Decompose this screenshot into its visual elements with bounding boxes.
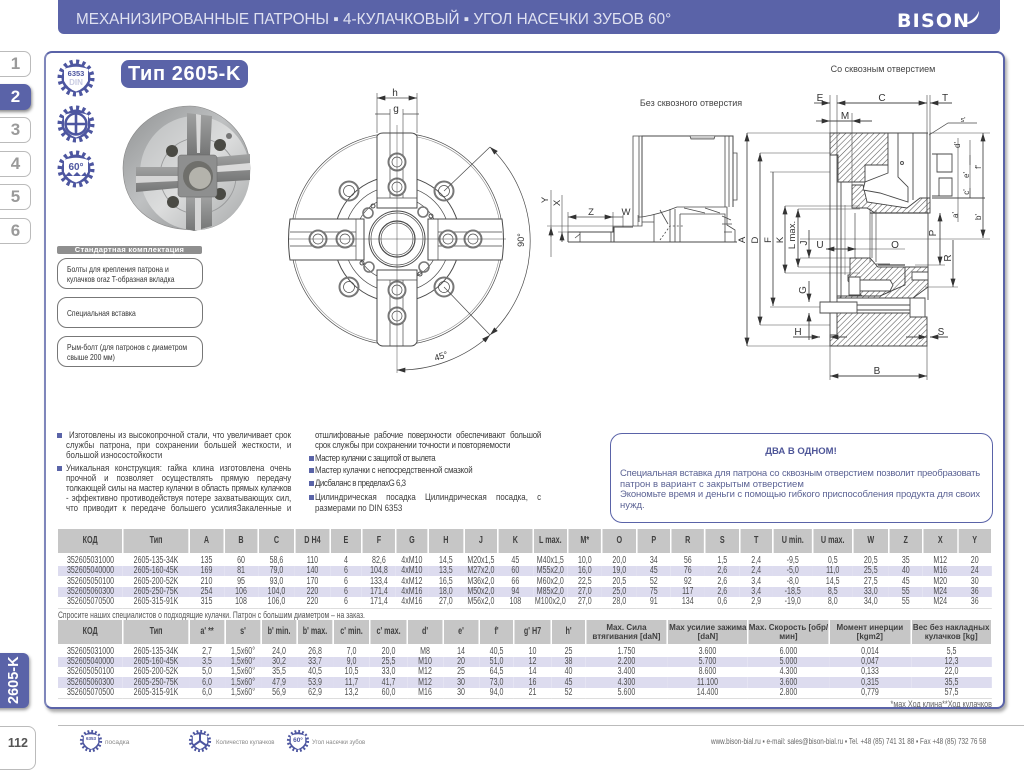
callout body: Специальная вставка для патрона со сквозным отверстием позволит преобразовать	[620, 468, 980, 479]
kit item: eye bolt: Рым-болт (для патронов с диаметром	[67, 342, 187, 352]
page number tab: 112	[8, 736, 28, 750]
tab 1	[0, 51, 31, 77]
specifications table: a' **	[200, 626, 214, 637]
specifications table: c' min.	[340, 626, 363, 637]
dimensions table: M*	[580, 535, 589, 546]
icon: 4 jaws badge	[60, 108, 92, 140]
section view labels: G	[798, 286, 809, 294]
kit item: eye bolt: свыше 200 мм)	[67, 352, 115, 362]
footer divider	[58, 724, 1024, 726]
icon: DIN 6353 badge: 6353	[68, 69, 84, 78]
section view labels: d'	[953, 142, 962, 148]
dimensions table: X	[938, 535, 943, 546]
dimensions table: O	[616, 535, 622, 546]
specifications table: [kgm2]	[857, 632, 883, 641]
callout body: Экономьте время и деньги с помощью гибкого приспособления продукта для своих	[620, 489, 980, 500]
specifications table: Тип	[150, 626, 162, 637]
front view labels	[392, 88, 526, 363]
side view labels: F	[763, 237, 774, 243]
side view labels: W	[622, 207, 631, 218]
tab 3: 3	[11, 120, 20, 139]
section view labels: T	[942, 93, 948, 104]
specifications table: f'	[494, 626, 499, 637]
section view labels: L max.	[787, 221, 798, 249]
kit item: bolts: кулачков oraz T-образная вкладка	[67, 274, 174, 284]
feature list right column: срок службы при сохранении точности и повторяемости	[315, 440, 510, 450]
icon: 60 degree teeth badge	[60, 153, 92, 185]
dimensions table: E	[344, 535, 348, 546]
kit item: bolts	[57, 258, 203, 289]
dimensions table: КОД	[83, 535, 98, 546]
front view labels: 45°	[433, 349, 449, 363]
side tab: 2605-K: 2605-K	[6, 657, 22, 704]
drawing: side view without through hole	[547, 136, 737, 257]
specifications table: мин]	[779, 632, 798, 641]
caption: with through hole: Со сквозным отверстием	[831, 64, 935, 74]
dimensions table: C	[274, 535, 279, 546]
feature list left column: Уникальная конструкция: гайка клина изготовлена очень	[66, 463, 291, 473]
logo: BISON: BISON	[897, 10, 970, 32]
side view labels: X	[552, 199, 563, 206]
section view labels: e'	[962, 172, 971, 178]
chuck photo illustration	[123, 106, 250, 231]
dimensions table: U min.	[782, 535, 804, 546]
feature list right column: отшлифованые рабочие поверхности обеспечивают большой	[315, 430, 541, 440]
tab 1: 1	[11, 54, 20, 73]
feature list left column: прочной и позволяет осуществлять прямую передачу	[66, 473, 291, 483]
feature list left column: - эффективно противодействуя потере захватывающих сил,	[66, 493, 291, 503]
specifications table: d'	[422, 626, 428, 637]
drawing: section view with through hole	[747, 95, 990, 380]
specifications table: b' max.	[303, 626, 327, 637]
feature list right column: Мастер кулачки с непосредственной смазкой	[315, 465, 472, 475]
standard kit heading	[57, 246, 202, 254]
tab 3	[0, 117, 31, 143]
side tab: 2605-K	[0, 653, 29, 708]
feature list right column: Дисбаланс в пределахG 6,3	[315, 478, 406, 488]
callout body: нужд.	[620, 500, 645, 511]
icon: DIN 6353 badge	[60, 62, 92, 94]
section view labels: B	[874, 366, 881, 377]
side view labels: Z	[588, 207, 594, 218]
specifications table: b' min.	[268, 626, 290, 637]
side view labels: Y	[540, 196, 551, 203]
dimensions table: J	[479, 535, 483, 546]
side view labels: A	[737, 236, 748, 243]
feature list left column: что приводит к передаче большего усилияЗакаленные и	[66, 503, 291, 513]
specifications table: Max. Сила	[606, 622, 647, 632]
icon: DIN 6353 badge: DIN	[69, 78, 83, 87]
feature list right column: размерами по DIN 6353	[315, 503, 402, 513]
footer icon: teeth angle	[288, 731, 365, 751]
drawing: front view of chuck	[288, 93, 530, 373]
section view labels: S	[938, 327, 945, 338]
section view labels: H	[794, 327, 802, 338]
front view labels: h	[392, 88, 398, 99]
section view labels: E	[817, 93, 824, 104]
dimensions table: Y	[972, 535, 977, 546]
side view labels: D	[750, 236, 761, 243]
section view labels: U	[816, 240, 824, 251]
dimensions table: H	[443, 535, 448, 546]
dimensions table: D H4	[304, 535, 321, 546]
side view labels: K	[775, 236, 786, 243]
specifications table: КОД	[83, 626, 98, 637]
dimensions table: B	[238, 535, 244, 546]
specifications table: Max. Скорость [обр/	[749, 622, 828, 632]
feature list left column	[57, 430, 292, 513]
tab 2 active: 2	[11, 87, 20, 106]
callout: two in one	[610, 433, 993, 523]
page number tab	[0, 726, 36, 770]
specifications table: g' H7	[524, 626, 541, 637]
section view labels: s'	[961, 117, 965, 124]
feature list right column: Мастер кулачки с защитой от вылета	[315, 453, 435, 463]
section view labels: c'	[962, 189, 971, 195]
feature list left column: большой износостойкости	[66, 450, 162, 460]
specifications table: c' max.	[376, 626, 401, 637]
dimensions table: P	[651, 535, 656, 546]
kit item: eye bolt	[57, 336, 203, 367]
dimensions table: S	[720, 535, 725, 546]
dimensions table: R	[685, 535, 690, 546]
dimensions table: W	[867, 535, 874, 546]
dimensions table: F	[377, 535, 381, 546]
tab 2 active	[0, 84, 31, 110]
type label pill: Тип 2605-K	[128, 63, 241, 85]
dimensions table: Тип	[150, 535, 162, 546]
section view labels: P	[928, 229, 939, 236]
dimensions table: Z	[904, 535, 908, 546]
dimensions table: K	[513, 535, 518, 546]
front view labels: g	[393, 104, 399, 115]
dimensions table	[58, 529, 992, 609]
section view labels	[787, 93, 983, 377]
callout body	[620, 468, 980, 511]
section view labels: J	[799, 240, 810, 246]
specifications table: втягивания [daN]	[593, 632, 661, 641]
tab 4: 4	[11, 154, 20, 173]
tab 4	[0, 151, 31, 177]
specifications table: e'	[458, 626, 464, 637]
footer icon: teeth angle: 60°	[293, 736, 303, 744]
kit item: bolts: Болты для крепления патрона и	[67, 264, 169, 274]
footer icon: number of jaws	[190, 731, 274, 751]
dimensions table: U max.	[821, 535, 845, 546]
dimensions table: A	[204, 535, 209, 546]
tab 6	[0, 218, 31, 244]
kit item: insert: Специальная вставка	[67, 308, 136, 318]
header banner	[58, 0, 1000, 34]
specifications table: Max усилие зажима	[669, 622, 746, 632]
footnote: *мах Ход клина**Ход кулачков	[891, 699, 992, 709]
footer icon: fit	[81, 731, 130, 751]
callout body: патрон в вариант с закрытым отверстием	[620, 478, 804, 490]
section view labels: R	[943, 254, 954, 262]
specifications table	[58, 620, 992, 699]
specifications table: Момент инерции	[837, 622, 903, 632]
section view labels: a'	[951, 212, 960, 218]
standard kit heading: Стандартная комплектация	[75, 245, 184, 254]
type label pill	[121, 60, 248, 88]
footer icon: number of jaws: Количество кулачков	[216, 740, 274, 746]
icon: 60 degree teeth badge: 60°	[68, 162, 84, 173]
callout heading: ДВА В ОДНОМ!	[765, 446, 837, 457]
feature list left column: толкающей силы на мастер кулачки в область прямых кулачков	[66, 483, 291, 493]
section view labels: M	[841, 111, 849, 122]
section view labels: C	[878, 93, 886, 104]
caption: without through hole: Без сквозного отверстия	[640, 98, 742, 108]
specifications table: кулачков [kg]	[925, 632, 978, 641]
dimensions table: L max.	[539, 535, 562, 546]
tab 5	[0, 184, 31, 210]
feature list left column: службы патрона, при сохранении большей жесткости, и	[66, 440, 291, 450]
section view labels: O	[891, 240, 899, 251]
dimensions table: G	[409, 535, 415, 546]
front view labels: 90°	[516, 233, 526, 247]
side view labels	[540, 196, 786, 243]
header title: МЕХАНИЗИРОВАННЫЕ ПАТРОНЫ ▪ 4-КУЛАЧКОВЫЙ ▪ УГОЛ НАСЕЧКИ ЗУБОВ 60°	[76, 11, 671, 28]
feature list left column: Изготовлены из высокопрочной стали, что увеличивает срок	[69, 430, 291, 440]
feature list right column: Цилиндрическая посадка Цилиндрическая посадка, с	[315, 492, 541, 502]
section view labels: f'	[974, 165, 983, 169]
section view labels: b'	[974, 214, 983, 220]
note under first table: Спросите наших специалистов о подходящие кулачки. Патрон с большим диаметром – на заказ.	[58, 610, 365, 621]
footer icon: fit: 6353	[86, 736, 97, 741]
tab 5: 5	[11, 187, 20, 206]
specifications table: h'	[565, 626, 572, 637]
specifications table: s'	[240, 626, 246, 637]
footer icon: fit: посадка	[105, 739, 130, 746]
footer contacts: www.bison-bial.ru ▪ e-mail: sales@bison-bial.ru ▪ Tel. +48 (85) 741 31 88 ▪ Fax +48 (85) 732 76 58	[711, 736, 986, 746]
tab 6: 6	[11, 221, 20, 240]
footer icon: teeth angle: Угол насечки зубов	[312, 740, 365, 746]
feature list right column	[309, 430, 541, 513]
kit item: insert	[57, 297, 203, 328]
specifications table: [daN]	[697, 632, 718, 641]
dimensions table: T	[754, 535, 758, 546]
specifications table: Вес без накладных	[913, 622, 990, 632]
